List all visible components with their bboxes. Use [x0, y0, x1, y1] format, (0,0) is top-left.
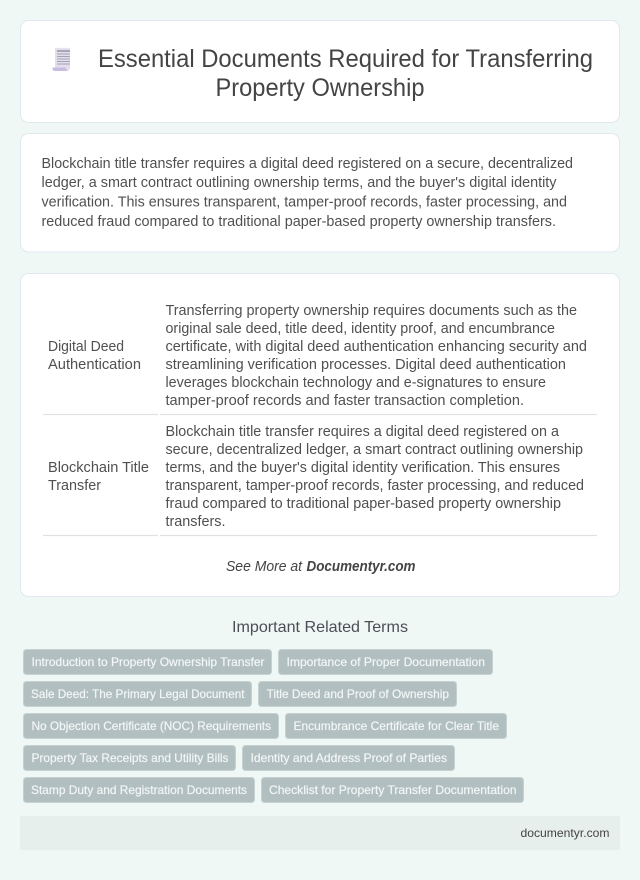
row label: digital deed authentication: Digital Deed	[48, 339, 124, 355]
chip: Encumbrance Certificate for Clear Title	[294, 719, 499, 733]
panel: summary text	[20, 134, 620, 252]
row description: blockchain title transfer: transfers.	[166, 514, 226, 530]
title: Essential Documents Required for Transferring	[98, 45, 593, 73]
row description: digital deed authentication: streamlining verification processes. Digital deed authentication	[166, 357, 566, 373]
title: Property Ownership	[216, 74, 424, 102]
chip: Introduction to Property Ownership Transfer	[32, 655, 264, 669]
heading: important related terms: Important Related Terms	[232, 619, 408, 636]
row label: blockchain title transfer	[48, 460, 149, 494]
row description: blockchain title transfer	[166, 424, 584, 530]
chip	[24, 682, 252, 706]
row description: blockchain title transfer: Blockchain title transfer requires a digital deed registered on a	[166, 424, 559, 440]
chip	[24, 778, 254, 802]
panel: document table	[20, 274, 620, 596]
chip: Property Tax Receipts and Utility Bills	[32, 751, 228, 765]
summary paragraph	[42, 156, 573, 230]
summary paragraph: Blockchain title transfer requires a digital deed registered on a secure, decentralized	[42, 156, 573, 172]
chip: Sale Deed: The Primary Legal Document	[31, 687, 245, 701]
chip	[242, 746, 454, 770]
summary paragraph: ledger, a smart contract outlining ownership terms, and the buyer's digital identity	[42, 175, 557, 191]
chip: Title Deed and Proof of Ownership	[266, 687, 449, 701]
panel: header	[20, 20, 620, 122]
row description: digital deed authentication: certificate, with digital deed authentication enhancing security and	[166, 339, 587, 355]
footer: documentyr.com	[520, 826, 610, 840]
row description: blockchain title transfer: secure, decentralized ledger, a smart contract outlining ownership	[166, 442, 583, 458]
chip	[262, 778, 524, 802]
see more link: Documentyr.com	[306, 559, 416, 575]
row description: digital deed authentication: original sale deed, title deed, identity proof, and encumbrance	[166, 321, 555, 337]
chip	[258, 682, 456, 706]
row description: digital deed authentication: leverages blockchain technology and e-signatures to ensure	[166, 375, 546, 391]
summary paragraph: verification. This ensures transparent, tamper-proof records, faster processing, and	[42, 194, 567, 210]
row description: blockchain title transfer: fraud compared to traditional paper-based property ownership	[166, 496, 561, 512]
see more link: See More at	[226, 559, 303, 575]
row description: digital deed authentication	[166, 303, 587, 409]
icon: document scroll	[52, 48, 70, 71]
row label: blockchain title transfer: Blockchain Title	[48, 460, 149, 476]
row label: blockchain title transfer: Transfer	[48, 478, 101, 494]
chip	[24, 650, 272, 674]
chip	[24, 714, 278, 738]
related terms chips	[24, 650, 524, 802]
chip: Importance of Proper Documentation	[286, 655, 485, 669]
chip: Checklist for Property Transfer Documentation	[269, 783, 516, 797]
chip: Identity and Address Proof of Parties	[250, 751, 447, 765]
row description: blockchain title transfer: transparent, tamper-proof records, faster processing, and reduced	[166, 478, 584, 494]
footer	[20, 816, 620, 850]
chip	[286, 714, 506, 738]
row label: digital deed authentication	[48, 339, 141, 373]
row description: digital deed authentication: Transferring property ownership requires documents such as the	[166, 303, 577, 319]
see more link	[226, 559, 416, 575]
title	[98, 45, 593, 102]
chip	[278, 650, 492, 674]
row label: digital deed authentication: Authentication	[48, 357, 141, 373]
table row: digital deed authentication	[43, 303, 597, 414]
chip	[24, 746, 236, 770]
chip: No Objection Certificate (NOC) Requirements	[32, 719, 271, 733]
summary paragraph: reduced fraud compared to traditional paper-based property ownership transfers.	[42, 214, 556, 230]
chip: Stamp Duty and Registration Documents	[31, 783, 247, 797]
row description: digital deed authentication: tamper-proof records and faster transaction completion.	[166, 393, 524, 409]
row description: blockchain title transfer: terms, and the buyer's digital identity verification. This ensures	[166, 460, 560, 476]
table row: blockchain title transfer	[43, 424, 597, 536]
